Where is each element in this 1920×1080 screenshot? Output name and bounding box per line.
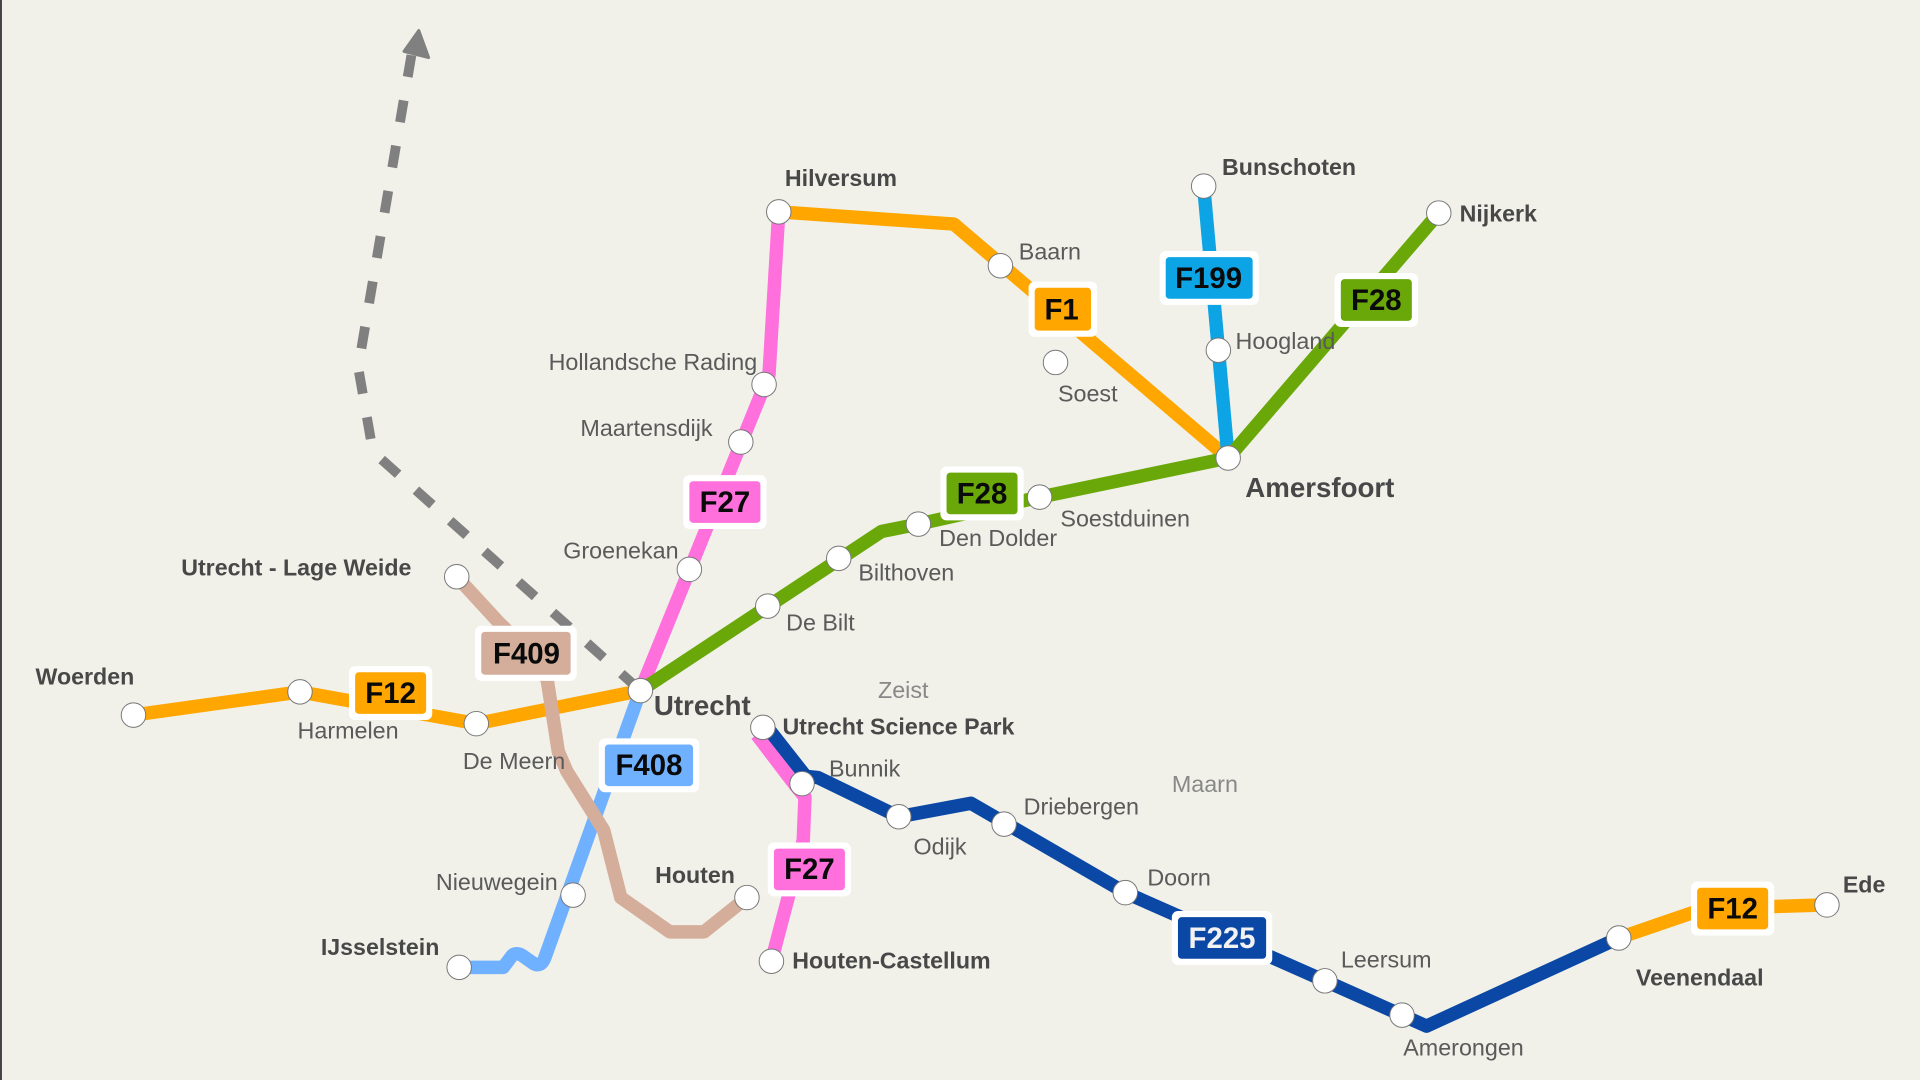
badge F12 west (349, 666, 432, 720)
station labels: De Bilt (786, 610, 855, 636)
station labels: Baarn (1019, 239, 1081, 265)
station labels: Amersfoort (1245, 472, 1394, 503)
badge F28 middle (940, 467, 1024, 520)
station labels: Soestduinen (1060, 506, 1190, 532)
stations (121, 174, 1839, 1027)
badge F199 (1160, 251, 1259, 305)
line F27 south (757, 735, 805, 961)
station labels: Ede (1843, 872, 1885, 898)
line F28 (640, 213, 1439, 691)
station labels: Amerongen (1403, 1035, 1524, 1061)
badge F225 (1172, 911, 1272, 965)
station labels: Utrecht (654, 690, 751, 721)
badge F12 east: F12 (1707, 892, 1758, 925)
badge F28 north: F28 (1351, 284, 1402, 317)
station labels: Doorn (1147, 864, 1211, 890)
badge F409: F409 (493, 638, 560, 671)
station labels: Veenendaal (1636, 965, 1764, 991)
station labels: Woerden (36, 663, 134, 689)
station labels: Houten (655, 862, 735, 888)
line F12 west (133, 691, 640, 724)
station labels: Driebergen (1024, 793, 1139, 819)
badge F27 south: F27 (784, 853, 835, 886)
station labels: Soest (1058, 381, 1118, 407)
station labels: De Meern (463, 748, 565, 774)
badge F27 north (683, 475, 767, 529)
badge F12 east (1691, 882, 1774, 936)
line F27 north (640, 212, 779, 691)
station labels: Maartensdijk (580, 415, 713, 441)
badge F409 (475, 626, 577, 681)
station labels: Houten-Castellum (792, 948, 991, 974)
badge F1: F1 (1044, 294, 1079, 327)
station labels: Bilthoven (858, 559, 954, 585)
badge F408: F408 (615, 749, 682, 782)
station labels: Hoogland (1236, 328, 1335, 354)
station labels: IJsselstein (321, 934, 439, 960)
line F12 east (1619, 905, 1827, 938)
line F409 (457, 577, 747, 932)
station labels: Zeist (878, 677, 929, 703)
badge F27 south (768, 842, 851, 896)
station labels: Den Dolder (939, 525, 1057, 551)
station labels: Utrecht Science Park (782, 714, 1015, 740)
station labels: Nijkerk (1460, 201, 1537, 227)
line F225 (765, 725, 1619, 1026)
badge F408 (599, 738, 699, 792)
line F408 (459, 691, 640, 967)
station labels: Groenekan (563, 537, 679, 563)
station labels: Odijk (913, 834, 967, 860)
station labels: Harmelen (298, 717, 399, 743)
station labels: Bunnik (829, 755, 901, 781)
station labels: Hilversum (785, 165, 897, 191)
badge F225: F225 (1189, 922, 1256, 955)
line F1 (779, 212, 1228, 458)
station labels: Bunschoten (1222, 154, 1356, 180)
badge F1 (1029, 282, 1097, 337)
dashed arrow line (358, 31, 640, 691)
line F199 (1204, 186, 1228, 458)
station labels: Leersum (1341, 946, 1432, 972)
station labels: Hollandsche Rading (549, 349, 757, 375)
station labels: Utrecht - Lage Weide (181, 555, 412, 581)
badge F199: F199 (1175, 262, 1242, 295)
station labels: Nieuwegein (436, 869, 558, 895)
badge F12 west: F12 (365, 677, 416, 710)
badge F28 middle: F28 (957, 477, 1007, 510)
station labels: Maarn (1172, 771, 1238, 797)
badge F27 north: F27 (700, 486, 750, 519)
badge F28 north (1335, 273, 1418, 327)
